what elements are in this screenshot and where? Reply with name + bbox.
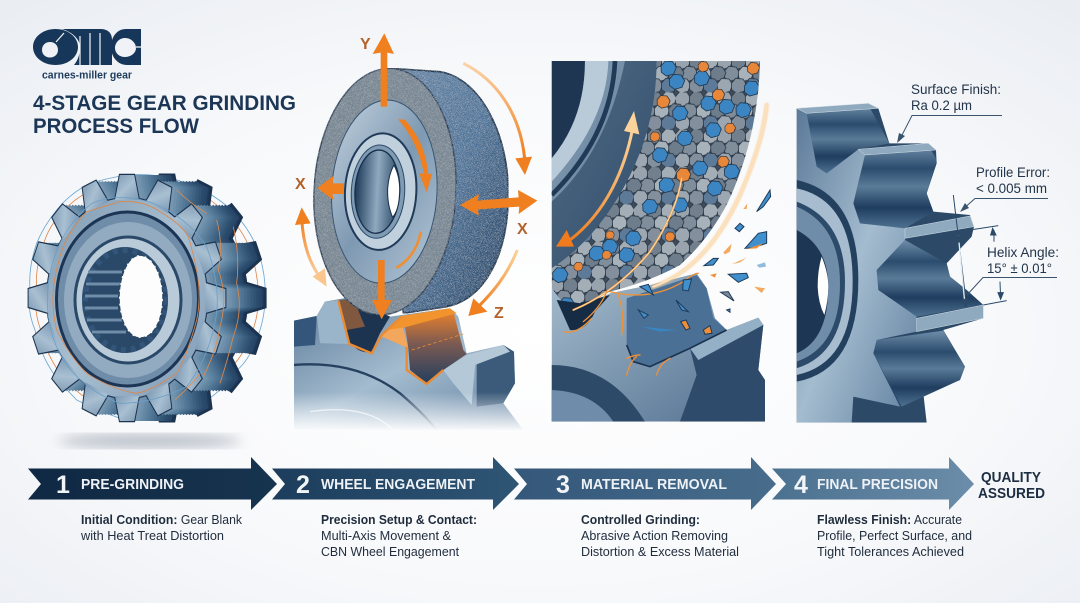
tooth tip lands	[797, 103, 983, 332]
arrow head: rotation right	[515, 157, 532, 175]
axis labels	[295, 36, 528, 322]
grinding wheel	[308, 65, 508, 319]
bottom fade over stage 2 gear	[290, 392, 545, 431]
process step 2: WHEEL ENGAGEMENT	[321, 477, 475, 493]
orange grains	[574, 62, 760, 271]
description 3: Abrasive Action Removing	[581, 529, 728, 543]
description 3: Distortion & Excess Material	[581, 545, 739, 559]
process step 1: PRE-GRINDING	[81, 477, 184, 493]
description 4: Profile, Perfect Surface, and	[817, 529, 972, 543]
callout: profile error	[960, 165, 1050, 212]
arrow: rotation right arc	[463, 63, 525, 158]
sparks	[563, 105, 767, 375]
callout: surface finish	[897, 82, 1002, 143]
gear workpiece under wheel	[294, 297, 523, 430]
axis labels: Y	[360, 36, 371, 53]
description 1	[80, 513, 243, 543]
arrow head: left arc top	[295, 207, 311, 225]
logo	[33, 29, 141, 82]
description 2: Precision Setup & Contact:	[321, 513, 477, 527]
process step 1	[28, 457, 277, 543]
gear front face	[797, 108, 917, 423]
panel: stage 4 final precision gear	[797, 103, 1007, 423]
process step 3: MATERIAL REMOVAL	[581, 477, 727, 493]
process step 4: FINAL PRECISION	[817, 477, 938, 493]
gear ground shadow	[58, 434, 242, 448]
gear front face	[29, 175, 225, 421]
description 2: CBN Wheel Engagement	[321, 545, 460, 559]
title: 4-STAGE GEAR GRINDING	[33, 91, 296, 115]
arrow 3	[514, 457, 776, 510]
process step 3	[514, 457, 776, 559]
description 3: Controlled Grinding:	[581, 513, 700, 527]
callout: profile error: < 0.005 mm	[976, 181, 1047, 196]
quality assured label: ASSURED	[978, 485, 1045, 502]
process step 4: 4	[794, 471, 808, 499]
arrow: left double arc	[302, 218, 321, 278]
face rings and splined bore	[56, 212, 198, 386]
debris particles	[638, 190, 771, 334]
arrow: down	[372, 260, 392, 319]
process step 4	[772, 457, 974, 559]
process step 2: 2	[296, 471, 310, 499]
wheel hub metal	[552, 61, 663, 275]
description 1: Initial Condition: Gear Blank	[81, 513, 243, 527]
panel: stage 1 distorted gear blank	[29, 175, 265, 448]
gear hub and bore	[797, 180, 858, 382]
title	[33, 91, 296, 138]
gear front face outline	[29, 175, 225, 421]
gear extruded back teeth	[33, 175, 265, 421]
description 1: with Heat Treat Distortion	[80, 529, 224, 543]
callout: helix angle: 15° ± 0.01°	[987, 261, 1052, 276]
blue CBN grains	[553, 61, 760, 313]
quality assured label: QUALITY	[981, 469, 1041, 486]
arrow: wheel rotation double arc	[570, 128, 633, 240]
gear workpiece	[552, 273, 765, 422]
process step 3: 3	[556, 471, 570, 499]
arrow 4	[772, 457, 974, 510]
callout: profile error: Profile Error:	[976, 165, 1050, 180]
arrow head: wheel rotation upper	[624, 111, 639, 134]
arrow head: Z	[468, 298, 487, 316]
outer distortion contour lines	[29, 175, 265, 419]
process step 1: 1	[56, 471, 70, 499]
description 2: Multi-Axis Movement &	[321, 529, 452, 543]
wheel rim	[390, 68, 508, 313]
arrow: X horizontal double	[460, 190, 537, 216]
quality assured label	[978, 469, 1045, 502]
description 4: Flawless Finish: Accurate	[817, 513, 962, 527]
abrasive grain band	[552, 61, 760, 304]
arrow head: wheel rotation lower	[556, 230, 574, 247]
arrow 1	[28, 457, 277, 510]
axis labels: X	[517, 221, 528, 238]
axis labels: Z	[494, 305, 504, 322]
arrow: X left	[317, 176, 344, 200]
callout: helix angle: Helix Angle:	[987, 245, 1059, 260]
description 4: Tight Tolerances Achieved	[817, 545, 964, 559]
arrow: Z arc	[478, 250, 517, 307]
callout: surface finish: Ra 0.2 µm	[911, 98, 972, 113]
arrow head: left arc bottom	[313, 268, 327, 287]
callout: helix angle	[967, 245, 1059, 295]
arrow: hub rotation arc	[398, 119, 432, 192]
panel: stage 3 material removal	[550, 55, 771, 422]
process step 2	[272, 457, 519, 559]
arrow 2	[272, 457, 519, 510]
logo: carnes-miller gear	[42, 70, 133, 82]
description 4	[817, 513, 972, 559]
axis labels: X	[295, 176, 306, 193]
arrow: Y up	[373, 33, 394, 107]
title: PROCESS FLOW	[33, 114, 200, 138]
panel: stage 2 wheel engagement	[294, 33, 537, 430]
on-gear distortion lines	[47, 190, 239, 403]
arrow: lower hub arc	[397, 233, 421, 267]
dimension lines	[953, 195, 1007, 307]
gear silhouette and side faces	[797, 103, 983, 423]
wheel hub and bore	[342, 132, 419, 252]
description 2	[321, 513, 477, 559]
wheel abrasive face	[308, 65, 462, 319]
motion arrows	[295, 33, 537, 319]
wheel disk	[327, 97, 442, 286]
description 3	[581, 513, 739, 559]
callout: surface finish: Surface Finish:	[911, 82, 1001, 97]
